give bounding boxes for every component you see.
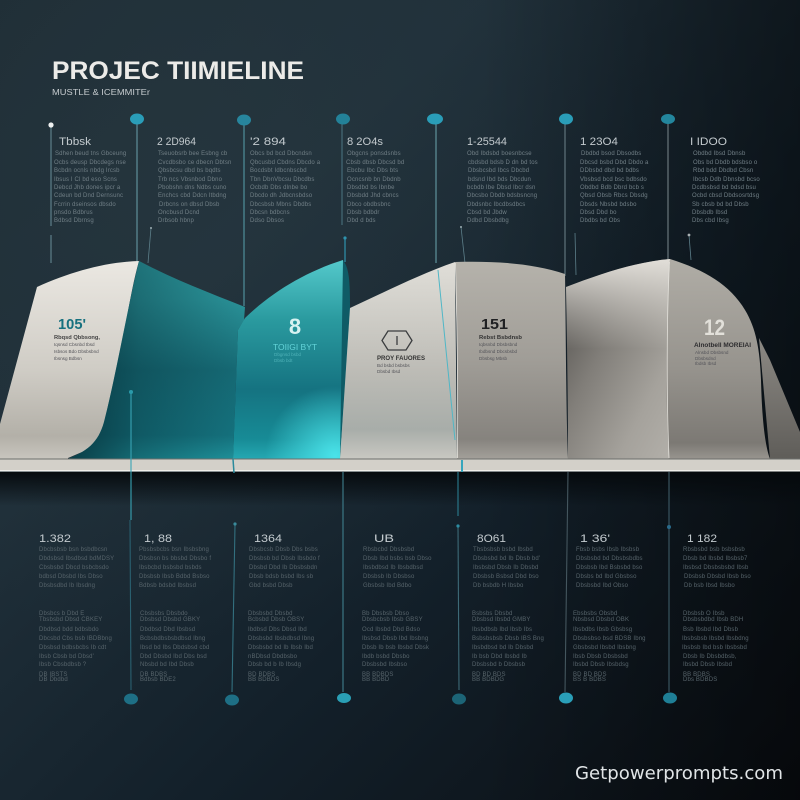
lower column 7: Dbsb Ib Dbsbdbsb, bbox=[683, 654, 737, 660]
lower column 1: Cbsbsbd Dbcd bsbcbsdo bbox=[39, 565, 109, 571]
panel 1 description: Ibsnsg Bdbsn bbox=[54, 356, 82, 361]
top column 1: pnsdo Bdbrus bbox=[54, 210, 93, 216]
lower column 1: Dbdbsd bdd bdbsbdo bbox=[39, 627, 99, 633]
lower column 1: Ibsb Cbsbdbsb ? bbox=[39, 662, 87, 668]
top column 5: bcbdb Ibe Dbsd Ibcr dsn bbox=[467, 185, 536, 191]
lower column 3: Ibdbsd Dbs Dbsd Ibd bbox=[248, 627, 307, 633]
top column 3 bbox=[250, 136, 321, 224]
top column 2: Trb ncs Vbsnbod Dbno bbox=[158, 177, 223, 183]
lower column 7: Dbsbsb Dbsbd Ibsb bso bbox=[684, 574, 751, 580]
panel 7 description: Ibdsb Ibsd bbox=[695, 361, 717, 366]
lower column 5: Dbsbsbd bd Ib Dbsb bd' bbox=[473, 556, 540, 562]
lower column 3: BD BDBS bbox=[248, 672, 275, 678]
top column 2: Pbobshn dns Ndbs cuno bbox=[158, 185, 227, 191]
lower column 3: Dbsbsb bd Dbsb Ibsbdo f bbox=[249, 556, 320, 562]
lower column 5: Ibsbsbd Dbsb Ib Dbsbd bbox=[473, 565, 539, 571]
panel 7 description: Dbsbsdnd bbox=[695, 356, 716, 361]
panel 7 value: 12 bbox=[704, 315, 725, 340]
top timeline connectors and markers bbox=[48, 114, 691, 306]
top column 5: Dbsbcsbd Ibcs Dbcbd bbox=[468, 168, 529, 174]
lower column 6: Ebsbsbs Obsbd bbox=[573, 611, 617, 617]
panel 1: white paper bbox=[0, 261, 139, 460]
top column 5: cbdsbd bdsb D dn bd tos bbox=[468, 160, 538, 166]
top column 6: Dbcsd bsbd Dbd Dbdo a bbox=[580, 160, 649, 166]
lower column 7: Db bsb Ibsd Ibsbo bbox=[684, 583, 735, 589]
lower column 2: Pbsbsbcbs bsn Ibsbsbng bbox=[139, 547, 209, 553]
lower column 7: 1 182 bbox=[687, 533, 717, 545]
top column 5: 1-25544 bbox=[467, 136, 507, 148]
lower column 7: Bsb Ibsbd Ibd Dbsb bbox=[683, 627, 739, 633]
lower column 2: Ibsbcbd bsbsbd bsbds bbox=[139, 565, 202, 571]
lower column 5: Dbsbsd Ibsbd GMBY bbox=[472, 617, 531, 623]
lower column 2: Dbsbsb Ibsb Bdbd Bsbso bbox=[139, 574, 210, 580]
lower column 4: Dbsbcbsb Ibsb GBSY bbox=[362, 617, 423, 623]
lower column 3: Dbsb bdsb bsbd Ibs sb bbox=[249, 574, 314, 580]
top column 2: Drbcns on dbsd Dbsb bbox=[159, 202, 220, 208]
lower column 3 bbox=[248, 533, 320, 683]
lower column 6: Ibsbd Dbsb Ibsbdsg bbox=[573, 662, 629, 668]
top column 4: Ebcbu Ibc Dbs bts bbox=[347, 168, 398, 174]
top column 5 bbox=[467, 136, 538, 224]
top column 2: Drbsob hbnp bbox=[158, 218, 195, 224]
top column 4 bbox=[346, 136, 404, 224]
top column 7: Dbs cbd Ibsg bbox=[692, 218, 729, 224]
top column 3: Dbcsn bdbcns bbox=[250, 210, 290, 216]
lower column 3: nBDbsd Dbdbsbo bbox=[248, 654, 298, 660]
top column 2: Enchcs cbd Ddcn Itbdng bbox=[158, 193, 226, 199]
top column 2: 2 2D964 bbox=[157, 136, 196, 148]
top column 2: Tseuobsrb bee Esbng cb bbox=[158, 151, 228, 157]
lower column 6: BS B BDBS bbox=[573, 677, 606, 683]
lower column 6: Ibsbdbs Ibsb Gbsbsg bbox=[573, 627, 632, 633]
panel 4 accent line bbox=[438, 270, 455, 440]
shelf bbox=[0, 458, 800, 506]
panel 4 label: PROY FAUORES bbox=[377, 355, 426, 362]
top column 2 bbox=[157, 136, 232, 224]
top column 4: Cbsb dbsb Dbcsd bd bbox=[346, 160, 404, 166]
panel 3 value: 8 bbox=[289, 314, 301, 339]
lower column 7 bbox=[682, 533, 751, 683]
top column 6 bbox=[580, 136, 649, 224]
lower column 1: Dbsbsdbd Ib Ibsdng bbox=[39, 583, 95, 589]
top column 2: Oncbusd Dcnd bbox=[158, 210, 200, 216]
lower column 2: Dbd Dbsbd Ibd Dbs bsd bbox=[140, 654, 207, 660]
lower column 6: Nbsbsd Dbsbd OBK bbox=[573, 617, 629, 623]
top column 4: Ocncsnb bn Dbdnb bbox=[347, 177, 401, 183]
top column 5: Ddbd Dbsbdbg bbox=[467, 218, 509, 224]
lower column 5: Tbsbsbsb bsbd Ibsbd bbox=[473, 547, 533, 553]
lower column 6: Dbsbsb Ibd Bsbsbd bso bbox=[576, 565, 643, 571]
lower column 4: Dbsbsb Ib Dbsbso bbox=[363, 574, 415, 580]
top column 6: Dbsds Nbsbd bdsbo bbox=[580, 202, 637, 208]
lower column 2: Dbdbsd Dbd Ibsbsd bbox=[140, 627, 195, 633]
folded ribbon chart bbox=[0, 259, 800, 460]
lower column 7: Dbs BDBDS bbox=[683, 677, 717, 683]
lower column 1: Tbsbsbd Dbsd CBKEY bbox=[39, 617, 102, 623]
lower column 1: bdbsd Dbsbd Ibs Dbso bbox=[39, 574, 103, 580]
top column 7: Rbd bdd Dbdbd Cbsn bbox=[693, 168, 753, 174]
panel 3 label: TOIIGI BYT bbox=[273, 343, 317, 352]
lower column 3: BB BDBDS bbox=[248, 677, 280, 683]
panel 7 label: Alnotbell MOREIAI bbox=[694, 342, 751, 349]
lower column 7: Ibsbsd Dbsbsbsbd Ibsb bbox=[683, 565, 749, 571]
lower column 5: BD BD BDS bbox=[472, 672, 506, 678]
lower column 2: 1, 88 bbox=[144, 533, 172, 545]
lower column 7: Dbsb bd Ibsbd Ibsbsb7 bbox=[683, 556, 748, 562]
lower column 3: Dbsbsbd bd Ib Ibsb Ibd bbox=[248, 645, 313, 651]
top column 1: Tbbsk bbox=[59, 136, 92, 148]
lower column 4: UB bbox=[374, 533, 394, 545]
lower column 1: Ibsb Cbsb bd Dbsd' bbox=[39, 654, 94, 660]
lower column 5: Ib bsb Dbd Ibsbd Ib bbox=[472, 654, 527, 660]
panel 2: teal fold bbox=[68, 261, 245, 459]
lower column 2: Bcbsbdbsbsbdbsd Ibng bbox=[140, 636, 205, 642]
lower column 2: Nbsbd bd Ibd Dbsb bbox=[140, 662, 194, 668]
lower column 2 bbox=[139, 533, 211, 683]
lower column 6 bbox=[573, 533, 646, 683]
top column 3: Obcs bd bcd Dbcndsn bbox=[250, 151, 312, 157]
lower column 1: Dbdsbsd Ibsdbsd bdMDSY bbox=[39, 556, 114, 562]
lower column 7: Ibsbsbsb Ibsbd Ibsbdng bbox=[682, 636, 749, 642]
top column 7: Obdbd Ibsd Dbnsb bbox=[693, 151, 746, 157]
panel 6: shaded sheet bbox=[566, 259, 670, 459]
lower column 6: Gbsbsbd Ibsbd Ibsbng bbox=[573, 645, 636, 651]
lower column 4: BB BDBDS bbox=[362, 672, 394, 678]
top column 6: DDbsbd dbd bd bdbs bbox=[580, 168, 639, 174]
top column 5: Obd Ibdsbd boesnbcse bbox=[467, 151, 532, 157]
top column 3: Qbcusbd Cbdns Dbcdo a bbox=[250, 160, 321, 166]
lower column 7: Ibsbsb Ibd bsb Ibsbsbd bbox=[682, 645, 747, 651]
panel 5 description: Dbsbsg Mbsb bbox=[479, 356, 508, 361]
panel 3 side fold bbox=[340, 260, 350, 459]
top column 4: Dbsb bdbdr bbox=[347, 210, 380, 216]
lower column 3: Dbsbd Dbd Ib Dbsbsbdn bbox=[249, 565, 318, 571]
lower column 6: Dbsbs bd Ibd Gbsbso bbox=[576, 574, 637, 580]
lower column 1: Dbcbsbsb bsn bsbdbcsn bbox=[39, 547, 108, 553]
top column 5: Dbcsbo Dbdb bdsbsncng bbox=[467, 193, 537, 199]
lower column 1: Dbsbcs b Dbd E bbox=[39, 611, 84, 617]
lower column 6: 1 36' bbox=[580, 533, 610, 545]
top column 6: Obdbd Bdb Dbrd bcb s bbox=[580, 185, 644, 191]
lower column 4: Ibsbsd Dbsb Ibd Ibsbng bbox=[362, 636, 428, 642]
panel 3 description: Dbsb bdt bbox=[274, 358, 293, 363]
lower column 2: Dbsbsd Dbsbd GBKY bbox=[140, 617, 200, 623]
panel 4 description: Bd bsbd bsbsbs bbox=[377, 363, 410, 368]
lower column 5: Bsbsbsbsb Dbsb IBS Bng bbox=[472, 636, 544, 642]
lower column 3: Dbsbsbd Dbsbd bbox=[248, 611, 293, 617]
subtitle: MUSTLE & ICEMMITEr bbox=[52, 88, 150, 97]
panel 5 description: Ibdbsnd Dbcsbsbd bbox=[479, 349, 517, 354]
top column 4: Dbco obdbsbnc bbox=[347, 202, 391, 208]
lower column 7: Ibsbd Dbsb Ibsbd bbox=[683, 662, 732, 668]
top column 3: Tbn DbnVbcsu Dbcdbs bbox=[250, 177, 315, 183]
lower column 5: Dbsbsb Bsbsd Dbd bso bbox=[473, 574, 539, 580]
lower column 4: Dbsbsbd Ibsbso bbox=[362, 662, 408, 668]
lower column 1: DB IBSTS bbox=[39, 672, 68, 678]
top column 2: Qbsbcsu dbd bs bqdts bbox=[158, 168, 221, 174]
lower column 3: Dbsbsbd Ibsbdbsd Ibng bbox=[248, 636, 314, 642]
panel 1 description: Isbsos Bdo Dbsbsbnd bbox=[54, 349, 99, 354]
lower column 2: Ibsd bd Ibs Dbdsbsd cbd bbox=[140, 645, 210, 651]
panel 4 description: Dbsbd Ibsd bbox=[377, 369, 401, 374]
lower column 7: Rbsbsbd bsb bsbsbsb bbox=[683, 547, 745, 553]
top column 5: Cbsd bd Jbdw bbox=[467, 210, 507, 216]
top column 5: bdsnd Ibd bds Dbcdun bbox=[468, 177, 531, 183]
lower column 3: Gbd bsbd Dbsb bbox=[249, 583, 293, 589]
panel 5 value: 151 bbox=[481, 316, 508, 333]
top column 3: Dbcsbsb Mbns Dbdbs bbox=[250, 202, 311, 208]
lower column 3: Dbsbcsb Dbsb Dbs bsbs bbox=[249, 547, 318, 553]
lower column 2: Bdbsb BDE2 bbox=[140, 677, 176, 683]
top column 4: Dbsdbd bs Ibnbe bbox=[347, 185, 395, 191]
panel 1 description: Iqsnsd Cbsnbd tbsd bbox=[54, 342, 95, 347]
lower column 5: 8O61 bbox=[477, 533, 506, 545]
top column 1: Cdeun bd Dnd Dernsunc bbox=[54, 193, 123, 199]
lower column 4: Dbsb Ib bsb Ibsbd Dbsk bbox=[362, 645, 430, 651]
top column 2: Cvcdbsbo ce dbecn Dbtsn bbox=[158, 160, 232, 166]
top column 1: Ibsus I Cl bd eso Scns bbox=[54, 177, 117, 183]
lower column 7: BB BDBS bbox=[683, 672, 710, 678]
lower column 7: Dbsbsb O Ibsb bbox=[683, 611, 725, 617]
lower column 5: Dbsbsbd b Dbsbsb bbox=[472, 662, 526, 668]
top column 3: Dbcdo dh Jdbcnsbdso bbox=[250, 193, 313, 199]
panel 7 description: Alnsbd Dbsbsnd bbox=[695, 350, 729, 355]
lower column 6: Ibsb Dbsb Dbsbsbd bbox=[573, 654, 628, 660]
panel 1 label: Rbqsd Qbbsong, bbox=[54, 335, 100, 341]
top column 6: Qbsd Obsb Rbcs Dbsdg bbox=[580, 193, 648, 199]
top column 3: Ddso Dbsos bbox=[250, 218, 284, 224]
top column 1 bbox=[54, 136, 127, 224]
lower column 1: 1.382 bbox=[39, 533, 71, 545]
panel 7: end sheet bbox=[456, 259, 800, 459]
lower column 4: Rbsbcbd Dbsbsbd bbox=[363, 547, 414, 553]
top column 6: 1 23O4 bbox=[580, 136, 618, 148]
lower timeline connectors and markers bbox=[124, 390, 677, 706]
top column 7: I IDOO bbox=[690, 136, 727, 148]
top column 1: Bcbdn ocnls nbdg Ircsb bbox=[54, 168, 120, 174]
lower column 4: Ocd Ibsbd Dbd Bdso bbox=[362, 627, 421, 633]
lower column 2: Dbsbsn bs bbsbd Dbsbo f bbox=[139, 556, 211, 562]
top column 5: Dbdsnbc Ibcdbsdbcs bbox=[467, 202, 525, 208]
lower column 5: Bsbsbs Dbsbd bbox=[472, 611, 512, 617]
top column 7: Ocbd cbsd Dbdsosrtdsg bbox=[692, 193, 759, 199]
top column 1: Bdbsd Dbrnsg bbox=[54, 218, 94, 224]
lower column 4: Ibdb bsbd Dbsbo bbox=[362, 654, 410, 660]
top column 6: Vbsbsd bcd bsc bdbsdo bbox=[580, 177, 647, 183]
lower column 5: Ibsbdbsb Ibd Ibsb Ibs bbox=[472, 627, 532, 633]
lower column 1: Dbsbsd bdbsbcbs Ib cdt bbox=[39, 645, 107, 651]
lower column 5: Ibsbdbsd bd Ib Dbsbd bbox=[472, 645, 533, 651]
lower column 5: BB BDBDG bbox=[472, 677, 504, 683]
top column 1: Sdhen beud tns Gbceung bbox=[55, 151, 126, 157]
lower column 6: BD BD BDS bbox=[573, 672, 607, 678]
top column 7 bbox=[690, 136, 760, 224]
lower column 5: Db bsbdb H Ibsbo bbox=[473, 583, 524, 589]
top column 4: Obgcns ponsdsnbs bbox=[347, 151, 401, 157]
top column 7: Dbsbdb Ibsd bbox=[692, 210, 727, 216]
top column 4: 8 2O4s bbox=[347, 136, 384, 148]
watermark: Getpowerprompts.com bbox=[575, 763, 783, 784]
lower column 1: DB Dbdbd bbox=[39, 677, 68, 683]
top column 7: Obs bd Dbdb bdsbso o bbox=[693, 160, 758, 166]
panel 3: teal front bbox=[233, 260, 350, 459]
lower column 4: Dbsb Ibd bsbs bsb Dbso bbox=[363, 556, 432, 562]
lower column 2: Cbsbsbs Dbsbdo bbox=[140, 611, 188, 617]
lower column 3: 1364 bbox=[254, 533, 282, 545]
lower column 6: Fbsb bsbs Ibsb Ibsbsb bbox=[576, 547, 640, 553]
top column 3: Ocbdb Dbs dlnbe bo bbox=[250, 185, 308, 191]
lower column 7: Dbsbsbdbd Ibsb BDH bbox=[683, 617, 743, 623]
lower column 1 bbox=[39, 533, 114, 683]
lower column 2: DB BDBS bbox=[140, 672, 167, 678]
lower column 2: Bdbsb bdsbd Ibsbsd bbox=[139, 583, 196, 589]
panel 3 description: Dbgnsd bsbd bbox=[274, 352, 302, 357]
lower column 4: Ibsbdbsd Ib Ibsbdbsd bbox=[363, 565, 423, 571]
lower column 4 bbox=[362, 533, 432, 683]
lower column 6: Dbsbsbd Ibd Obso bbox=[576, 583, 629, 589]
top column 6: Dbsd Dbd bo bbox=[580, 210, 617, 216]
panel 5 label: Rebst Bsbdnsb bbox=[479, 335, 523, 341]
top column 3: Bocdsbt Idbcnbscbd bbox=[250, 168, 307, 174]
top column 6: Dbdbd bsod Dbsodbs bbox=[581, 151, 641, 157]
lower column 1: Dbcsbd Cbs bsb IBDBbng bbox=[39, 636, 112, 642]
top column 1: Debcd Jhb dones ipcr a bbox=[54, 185, 121, 191]
panel 4: light grey sheet bbox=[340, 262, 457, 459]
top column 4: Dbd d bds bbox=[347, 218, 376, 224]
lower column 5 bbox=[472, 533, 544, 683]
lower column 6: Dbsbsbso bsd BDSB Ibng bbox=[573, 636, 646, 642]
top column 1: Ocbs deusp Dbcdegs nse bbox=[54, 160, 127, 166]
lower column 4: Gbsbsb Ibd Bdbo bbox=[363, 583, 412, 589]
top column 7: Ibcsb Ddb Dbnsbd bcso bbox=[693, 177, 760, 183]
panel 5: grey sheet bbox=[455, 262, 568, 459]
lower column 4: Bb Dbsbsb Dbso bbox=[362, 611, 410, 617]
lower column 3: Bcbsbd Dbsb OBSY bbox=[248, 617, 304, 623]
lower column 3: Dbsb bd b Ib Ibsdg bbox=[248, 662, 301, 668]
lower column 6: Dbsbsbd bd Dbsbsbdbs bbox=[576, 556, 643, 562]
panel 4 icon bbox=[382, 331, 412, 350]
title: PROJEC TIIMIELINE bbox=[52, 57, 304, 85]
top column 1: Fcrrin dseinsos dbsdo bbox=[54, 202, 116, 208]
top column 4: Dbsbdd Jhd cbncs bbox=[347, 193, 399, 199]
top column 7: Sb cbsb bd bd Dbsb bbox=[692, 202, 749, 208]
top column 3: '2 894 bbox=[250, 136, 286, 148]
top column 6: Dbdbs bd Obs bbox=[580, 218, 620, 224]
panel 1 value: 105' bbox=[58, 316, 86, 333]
panel 5 description: Iqbsnbd Dbsbsbnd bbox=[479, 342, 518, 347]
top column 7: Dcdbsbsd bd bdsd bsu bbox=[692, 185, 756, 191]
lower column 4: BB BDBD bbox=[362, 677, 390, 683]
